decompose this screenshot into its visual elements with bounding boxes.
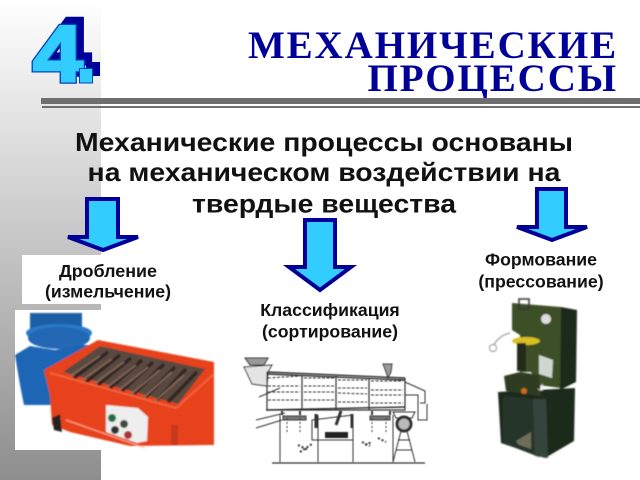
image: classifier schematic xyxy=(244,358,427,463)
icon: number 4: 4 xyxy=(40,1,90,91)
label: classification: Классификация xyxy=(260,300,400,320)
label: crushing xyxy=(22,255,171,304)
icon: number 4 xyxy=(33,1,100,98)
label: forming: Формование xyxy=(485,250,597,270)
label: forming xyxy=(478,250,604,292)
arrow: forming xyxy=(517,189,587,240)
label: crushing: Дробление xyxy=(59,261,157,281)
sidebar background xyxy=(0,0,101,480)
arrow: classification xyxy=(289,220,351,290)
image: forming press xyxy=(490,299,577,458)
intro text: твердые вещества xyxy=(192,189,457,218)
title: ПРОЦЕССЫ xyxy=(368,57,618,100)
label: classification xyxy=(260,300,400,342)
label: crushing: (измельчение) xyxy=(45,282,171,302)
label: classification: (сортирование) xyxy=(262,322,398,342)
arrow: crushing xyxy=(68,199,138,250)
label: forming: (прессование) xyxy=(478,272,604,292)
intro text: Механические процессы основаны xyxy=(75,127,573,157)
intro text: на механическом воздействии на xyxy=(88,157,561,187)
title: МЕХАНИЧЕСКИЕ xyxy=(248,24,618,67)
intro text xyxy=(75,127,573,218)
title underline xyxy=(41,98,640,108)
image: shredder machine xyxy=(15,310,215,450)
icon: number 4: 4 xyxy=(33,8,83,98)
icon: number 4: 4 xyxy=(33,8,83,98)
title xyxy=(248,24,618,100)
